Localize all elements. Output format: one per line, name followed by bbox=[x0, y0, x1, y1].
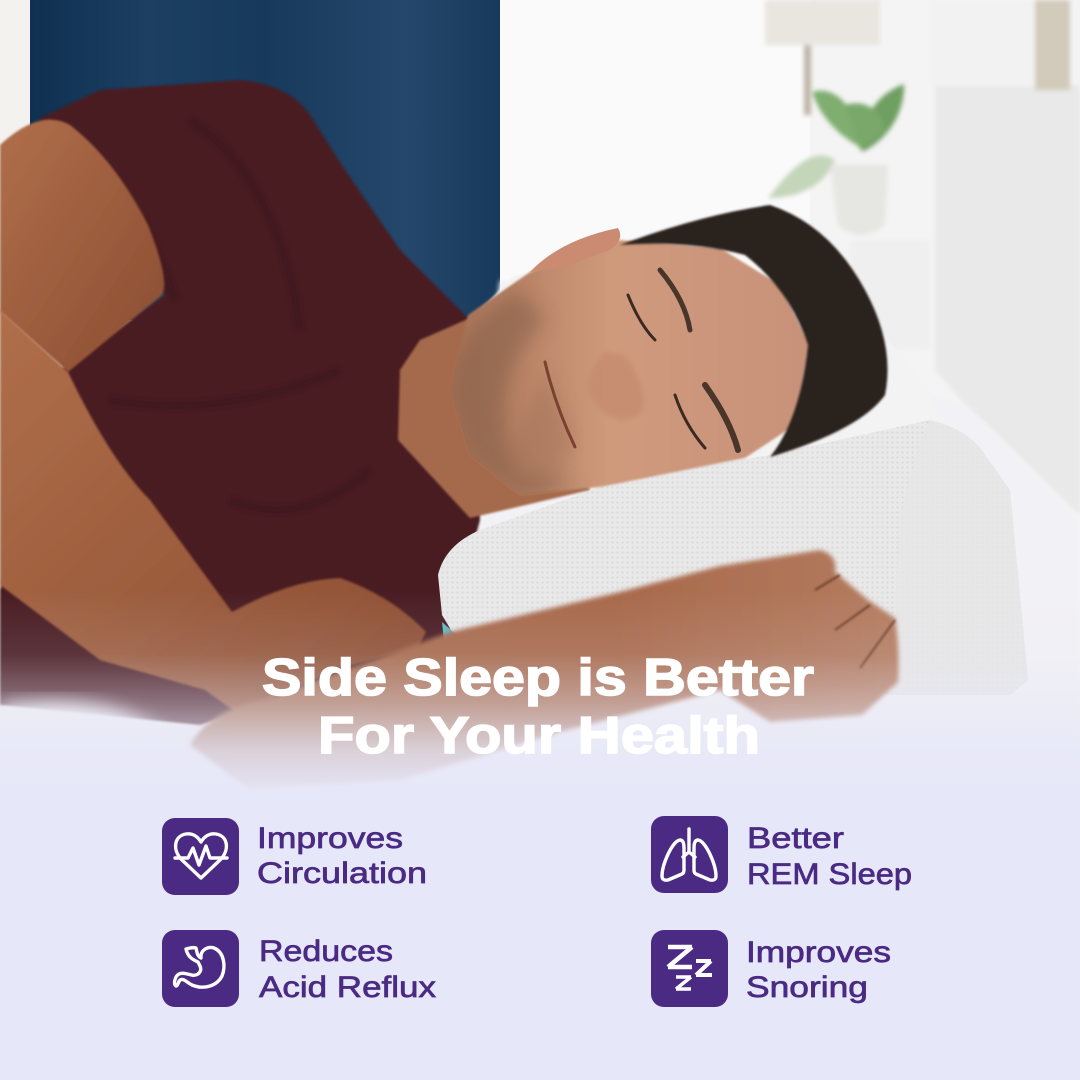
title: Side Sleep is Better bbox=[262, 649, 814, 707]
far arm hugging pillow bbox=[190, 550, 899, 790]
label: REM Sleep bbox=[747, 858, 912, 891]
icon: lungs bbox=[651, 816, 728, 893]
shirt shadow folds bbox=[110, 120, 370, 510]
benefit: improves circulation bbox=[162, 818, 427, 895]
label: Improves bbox=[746, 936, 891, 969]
label: Circulation bbox=[257, 857, 427, 890]
label bbox=[257, 822, 427, 890]
label: Improves bbox=[257, 822, 403, 855]
blue curtain bbox=[30, 0, 500, 320]
photo: man sleeping on side on a pillow bbox=[0, 0, 1080, 784]
lower pillow bbox=[438, 420, 1028, 695]
label bbox=[747, 822, 912, 891]
lower panel background bbox=[0, 805, 1080, 1080]
finger lines bbox=[815, 575, 895, 668]
eyebrows, eyes, nose, mouth bbox=[545, 270, 738, 450]
label: Snoring bbox=[746, 971, 868, 1004]
potted plant bbox=[768, 84, 930, 350]
stubble shadow bbox=[450, 290, 580, 500]
label bbox=[746, 936, 891, 1004]
forearm and hand bbox=[0, 310, 426, 714]
title bbox=[262, 649, 814, 765]
lavender fade into lower panel bbox=[0, 590, 1080, 805]
hair bbox=[620, 205, 888, 457]
label bbox=[259, 935, 436, 1004]
benefit: reduces acid reflux bbox=[162, 930, 436, 1007]
label: Reduces bbox=[259, 935, 393, 968]
upper arm bbox=[0, 120, 164, 372]
lamp and framed picture bbox=[765, 0, 1070, 115]
label: Better bbox=[747, 822, 844, 855]
benefit: improves snoring bbox=[651, 930, 891, 1007]
shirt bbox=[0, 80, 480, 725]
bed sheet bbox=[0, 280, 1080, 1080]
ear bbox=[530, 228, 620, 272]
label: Acid Reflux bbox=[259, 971, 436, 1004]
icon: stomach bbox=[162, 930, 239, 1007]
icon: zzz bbox=[651, 930, 728, 1007]
benefit: better REM sleep bbox=[651, 816, 912, 893]
face bbox=[450, 228, 810, 500]
upper pillow behind head bbox=[478, 275, 940, 470]
title: For Your Health bbox=[318, 707, 760, 765]
neck bbox=[398, 318, 590, 518]
near sheet fold bbox=[0, 702, 170, 800]
icon: heart with pulse bbox=[162, 818, 239, 895]
